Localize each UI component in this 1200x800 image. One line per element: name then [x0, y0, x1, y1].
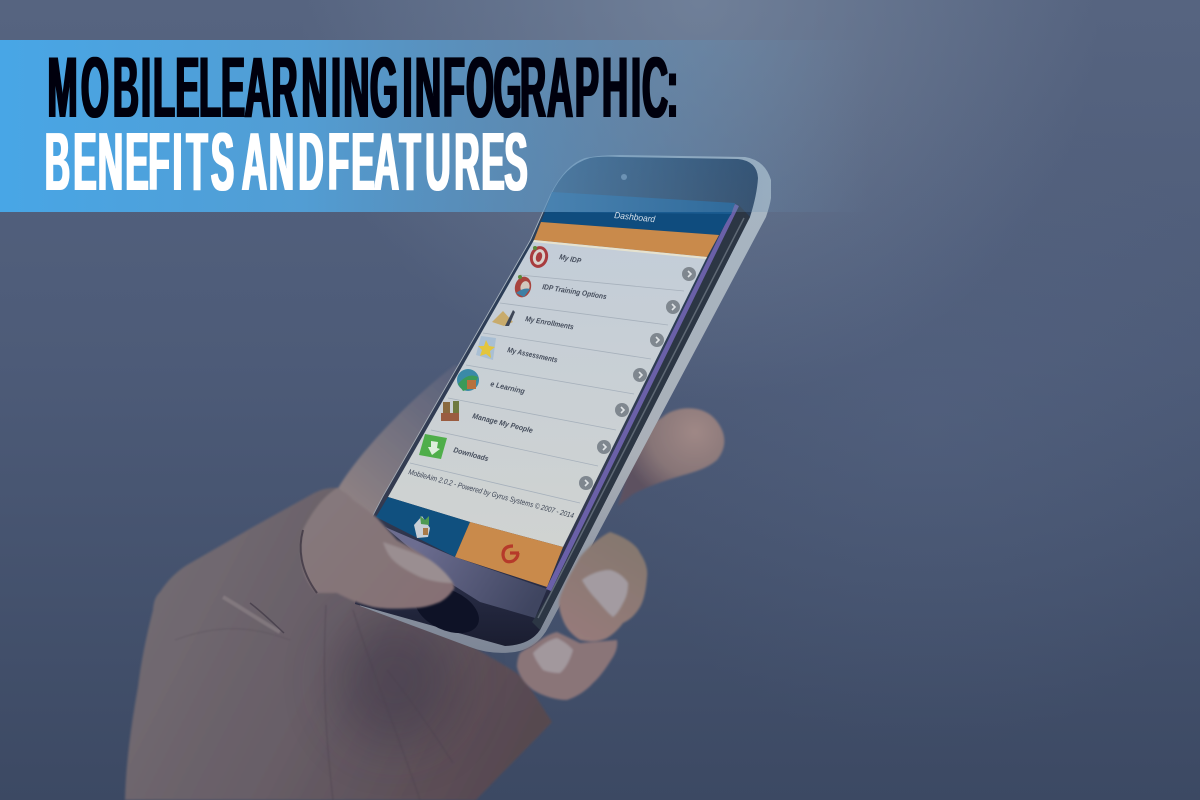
row arrows	[579, 267, 696, 490]
hand: palm and fingers behind phone	[125, 365, 724, 800]
hand: fingers over phone	[301, 488, 647, 700]
icon: training target	[513, 275, 533, 299]
icon: downloads	[419, 434, 447, 459]
screen header	[541, 210, 731, 235]
palm shadow	[335, 615, 455, 745]
icon: enrollments	[492, 310, 515, 326]
menu labels: My Enrollments	[525, 314, 574, 331]
icon: home	[414, 516, 430, 538]
palm fold	[223, 597, 284, 633]
little finger nail	[533, 638, 573, 673]
palm	[125, 488, 552, 800]
icon: globe	[457, 369, 479, 391]
title	[45, 39, 679, 208]
screen underside wash	[385, 527, 547, 618]
orange band	[534, 222, 719, 257]
phone dark bezel	[355, 157, 758, 646]
title banner	[0, 40, 870, 212]
little finger	[517, 632, 617, 700]
thumb crease	[301, 530, 317, 593]
menu labels: My Assessments	[507, 345, 558, 365]
home button	[408, 578, 486, 642]
index finger behind phone	[337, 365, 472, 525]
screen list	[388, 240, 707, 547]
menu labels: My IDP	[559, 252, 583, 266]
thumb nail	[383, 542, 453, 583]
menu labels: IDP Training Options	[542, 282, 607, 301]
footer note: MobileAim 2.0.2 - Powered by Gyrus Systems © 2007 - 2014	[407, 467, 575, 520]
menu labels: Manage My People	[472, 411, 534, 435]
ring finger	[559, 532, 647, 641]
title line 2: BENEFITS AND FEATURES	[45, 116, 528, 208]
icon: power	[503, 546, 519, 562]
bottom right nav button	[455, 522, 563, 587]
bottom left nav button	[376, 497, 470, 557]
bezel highlight stripe	[538, 218, 744, 618]
menu labels	[452, 252, 607, 463]
purple screen edge reflection	[546, 204, 739, 591]
icon: people	[441, 401, 459, 421]
thumb	[301, 488, 454, 609]
ring finger nail	[582, 570, 628, 617]
icon: target	[527, 244, 551, 270]
title line 1: MOBILE LEARNING INFOGRAPHIC:	[47, 39, 679, 135]
phone	[355, 155, 771, 653]
header title: Dashboard	[614, 210, 657, 224]
menu labels: Downloads	[452, 445, 490, 463]
menu labels: e Learning	[490, 379, 526, 396]
camera	[621, 174, 627, 180]
middle finger	[618, 408, 724, 506]
phone silver frame	[360, 155, 771, 653]
icon: assessment star	[476, 336, 496, 360]
palm creases	[175, 605, 453, 800]
screen top bar	[545, 192, 735, 215]
dark side band	[532, 204, 750, 630]
